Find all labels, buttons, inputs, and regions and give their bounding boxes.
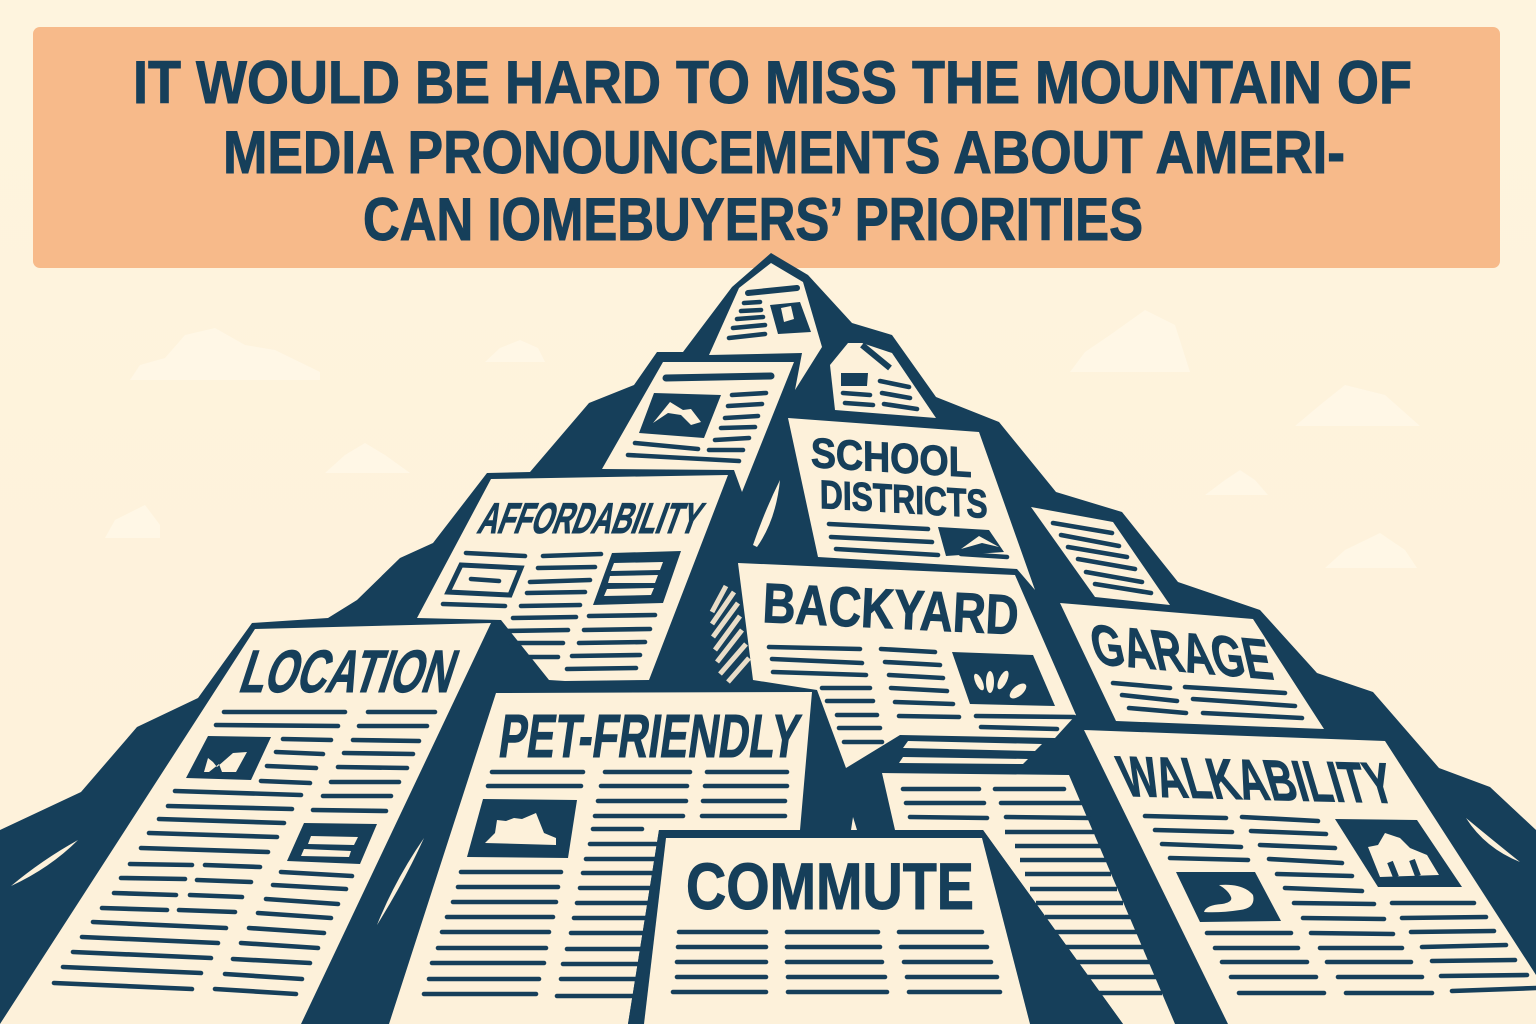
newspaper: walkability	[1084, 730, 1536, 1024]
icon: splash picture	[952, 652, 1055, 706]
icon: mountain picture	[639, 393, 721, 438]
newspaper: sheet behind commute	[882, 773, 1175, 1024]
icon: text box	[593, 551, 681, 605]
title	[133, 49, 1412, 253]
newspaper: small right sheet	[1031, 507, 1170, 605]
newspaper: location	[0, 623, 491, 1024]
title: IT WOULD BE HARD TO MISS THE MOUNTAIN OF	[133, 49, 1412, 116]
clouds	[105, 310, 1420, 568]
icon: bars picture	[287, 823, 377, 864]
newspaper: mountain picture sheet	[602, 362, 794, 492]
icon: school picture	[938, 527, 1004, 556]
icon: house picture	[1335, 819, 1462, 887]
icon: outlined box	[448, 565, 521, 595]
mountain silhouette	[0, 253, 1536, 1024]
newspaper: summit	[709, 263, 822, 390]
headline: DISTRICTS	[820, 473, 988, 527]
headline: AFFORDABILITY	[472, 495, 710, 543]
icon: check picture	[186, 736, 271, 780]
newspaper: backyard	[738, 563, 1076, 768]
newspaper: school districts	[788, 418, 1035, 590]
newspaper: small house-shaped sheet	[830, 343, 936, 418]
newspaper: pet-friendly	[389, 692, 812, 1024]
lower edge strips	[899, 741, 1042, 764]
newspaper: commute	[628, 830, 1123, 1024]
title: MEDIA PRONOUNCEMENTS ABOUT AMERI-	[223, 119, 1345, 186]
newspaper: affordability	[417, 475, 728, 681]
headline: COMMUTE	[686, 849, 974, 923]
headline: BACKYARD	[761, 571, 1020, 646]
headline: SCHOOL	[811, 429, 972, 486]
title: CAN IOMEBUYERS’ PRIORITIES	[363, 186, 1143, 253]
headline: WALKABILITY	[1111, 745, 1402, 816]
headline: PET-FRIENDLY	[495, 702, 805, 770]
icon: summit picture	[770, 302, 811, 334]
icon: animal picture	[467, 799, 577, 858]
headline: GARAGE	[1084, 613, 1278, 693]
newspaper: stacked edge stripes	[712, 586, 749, 682]
newspaper: garage	[1060, 603, 1324, 729]
headline	[811, 429, 988, 527]
highlights on mountain	[11, 480, 1520, 925]
icon: moon picture	[1176, 872, 1281, 922]
banner	[33, 27, 1500, 268]
headline: LOCATION	[233, 638, 466, 706]
